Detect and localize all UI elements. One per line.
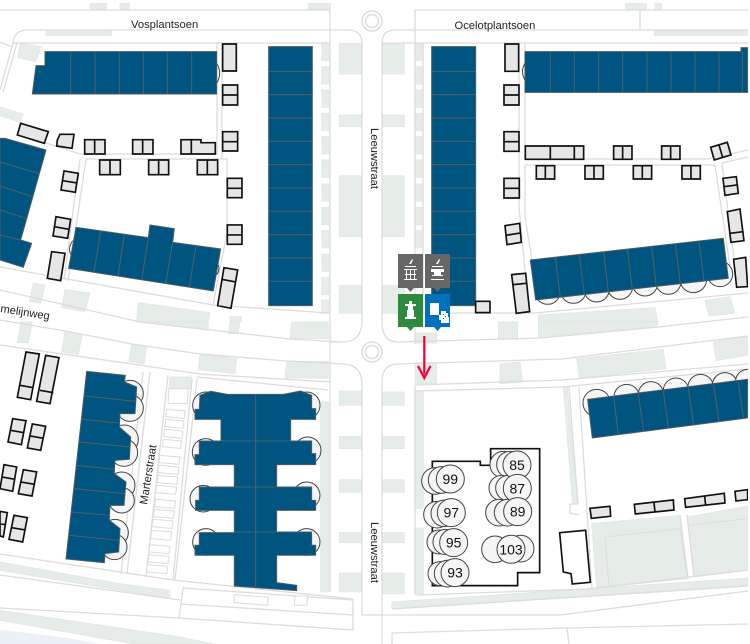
street label: Leeuwstraat lower: Leeuwstraat — [368, 522, 380, 584]
housing block outline with numbered entrances: 93 — [447, 565, 463, 581]
green strips top-left — [0, 3, 362, 322]
housing block outline with numbered entrances: 97 — [444, 505, 459, 521]
building block: angled lower right row with garden circles — [583, 369, 750, 438]
arrow: red location pointer — [418, 336, 430, 378]
building block: angled far left — [0, 138, 46, 267]
building block: long column right of Leeuwstraat — [432, 47, 476, 306]
housing block outline with numbered entrances: 95 — [446, 535, 462, 551]
housing block outline with numbered entrances — [422, 449, 540, 587]
green strips top-right — [383, 3, 748, 322]
green strips bottom-right — [383, 322, 748, 609]
roundabouts — [362, 11, 382, 362]
garages top-left — [17, 44, 242, 308]
marker: blue paper container — [425, 294, 450, 331]
street label: Leeuwstraat upper: Leeuwstraat — [368, 128, 380, 190]
building block: top-left row — [32, 52, 217, 94]
housing block outline with numbered entrances: 103 — [499, 541, 523, 557]
street label: Ocelotplantsoen: Ocelotplantsoen — [454, 20, 535, 32]
street label: Vosplantsoen: Vosplantsoen — [131, 19, 198, 31]
building block: centre-left row — [69, 225, 221, 291]
rear garden arcs top-left — [69, 63, 220, 275]
marker: gray waste icon right — [425, 254, 450, 292]
green strips bottom-left — [0, 322, 362, 644]
building block: angled row right — [530, 238, 728, 300]
building block: angled Marterstraat row with garden circles — [66, 371, 143, 563]
page margin — [748, 0, 750, 644]
garages bottom-left — [0, 352, 59, 542]
building block: long column left of Leeuwstraat — [269, 47, 312, 306]
marker: gray waste icon left — [398, 254, 423, 292]
building block: top-right row — [522, 48, 748, 92]
garages bottom-right — [560, 490, 748, 584]
rear garden circles under right row — [535, 261, 733, 304]
water strip — [0, 630, 100, 644]
housing block outline with numbered entrances: 85 — [509, 457, 525, 473]
marker: green glass container — [398, 294, 423, 331]
building block: central complex with garden circles — [190, 391, 321, 591]
housing block outline with numbered entrances: 87 — [510, 480, 525, 496]
housing block outline with numbered entrances: 89 — [510, 504, 526, 520]
housing block outline with numbered entrances: 99 — [443, 471, 458, 487]
parking bays Marterstraat — [147, 389, 308, 605]
street label: Marterstraat: Marterstraat — [138, 443, 160, 505]
garages top-right — [476, 44, 748, 313]
street label: Hermelijnweg: melijnweg — [0, 303, 51, 323]
